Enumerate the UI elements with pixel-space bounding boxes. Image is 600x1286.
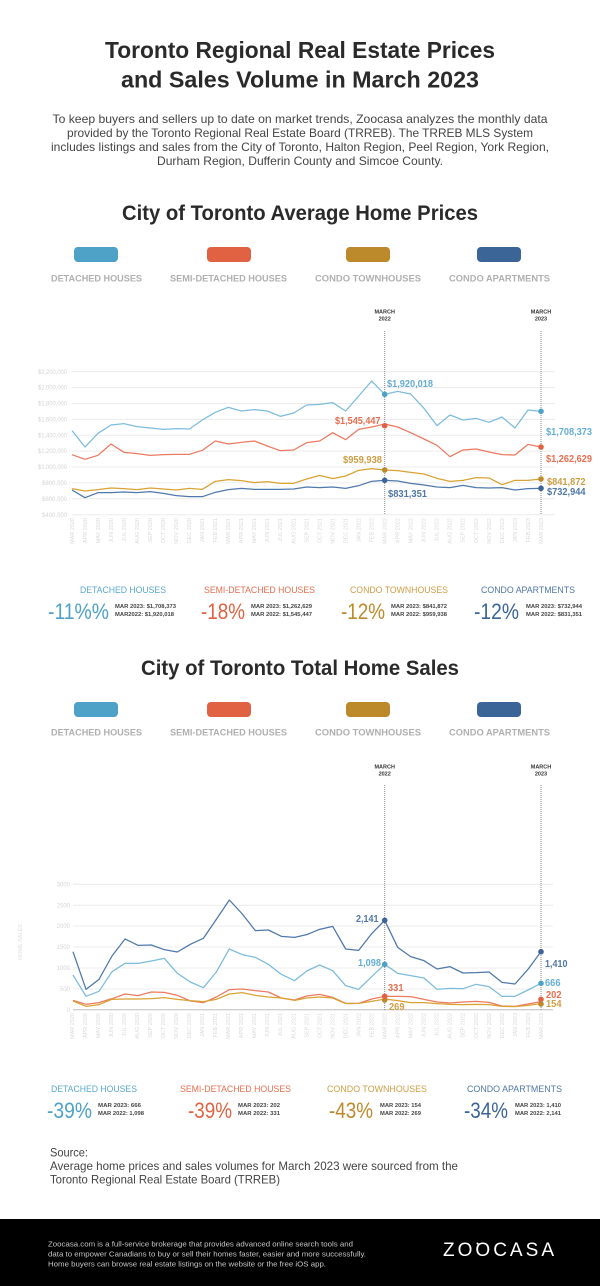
x axis month labels: JAN 2022 <box>356 518 362 542</box>
x axis month labels: SEP 2022 <box>461 1013 467 1038</box>
x axis month labels: JUL 2020 <box>122 518 128 541</box>
data points and value labels: $1,920,018 <box>387 378 433 390</box>
x axis month labels: MAY 2022 <box>409 518 415 543</box>
x axis month labels <box>70 1013 545 1039</box>
march markers: 2022 <box>379 772 391 778</box>
march markers: MARCH <box>531 310 551 316</box>
data points and value labels: $841,872 <box>547 476 586 488</box>
data points and value labels: $1,708,373 <box>546 426 592 438</box>
stats row: prices <box>48 585 583 624</box>
intro text block: To keep buyers and sellers up to date on market trends, Zoocasa analyzes the monthly data <box>52 112 548 126</box>
y axis grid and labels: $1,600,000 <box>38 418 68 424</box>
x axis month labels: AUG 2021 <box>292 1013 298 1039</box>
y axis grid and labels: $1,400,000 <box>38 433 68 439</box>
y axis grid and labels: $1,200,000 <box>38 449 68 455</box>
heading: total home sales: City of Toronto Total Home Sales <box>141 657 459 680</box>
source text block: Source: <box>50 1146 88 1160</box>
x axis month labels: APR 2021 <box>239 1013 245 1038</box>
data points and value labels: $831,351 <box>388 488 427 500</box>
stat: detached <box>47 1084 144 1123</box>
y axis grid and labels: 3000 <box>57 882 71 888</box>
line chart: average home prices <box>38 310 592 544</box>
stat: townhouses: MAR 2022: 269 <box>380 1111 421 1117</box>
footer text: Home buyers can browse real estate listings on the website or the free iOS app. <box>48 1260 326 1268</box>
stat: apartments: -34% <box>464 1098 508 1123</box>
stat: detached: MAR 2023: $1,708,373 <box>115 604 176 610</box>
x axis month labels: NOV 2021 <box>330 1013 336 1039</box>
march markers: 2023 <box>535 316 547 322</box>
title <box>105 37 495 92</box>
intro text block: Durham Region, Dufferin County and Simcoe County. <box>157 154 443 168</box>
footer text <box>48 1240 366 1268</box>
x axis month labels: APR 2021 <box>239 518 245 543</box>
x axis month labels: MAR 2023 <box>539 1013 545 1039</box>
x axis month labels: NOV 2022 <box>487 518 493 544</box>
source text block: Toronto Regional Real Estate Board (TRREB) <box>50 1173 280 1187</box>
x axis month labels: MAY 2021 <box>252 518 258 543</box>
stat: apartments: CONDO APARTMENTS <box>467 1084 562 1094</box>
y axis grid and labels <box>38 370 555 519</box>
footer <box>0 1219 600 1286</box>
stat: semi-detached: -39% <box>188 1098 232 1123</box>
x axis month labels: FEB 2023 <box>526 518 532 542</box>
x axis month labels: APR 2020 <box>83 1013 89 1038</box>
x axis month labels: AUG 2022 <box>448 1013 454 1039</box>
x axis month labels: JAN 2022 <box>356 1013 362 1037</box>
stat: townhouses: MAR 2022: $959,938 <box>391 612 447 618</box>
y axis grid and labels: $800,000 <box>42 481 68 487</box>
x axis month labels: OCT 2022 <box>474 1013 480 1038</box>
y axis grid and labels: $400,000 <box>42 513 68 519</box>
x axis month labels: DEC 2021 <box>344 1013 350 1038</box>
y axis grid and labels <box>57 882 553 1014</box>
stat: semi-detached: MAR 2023: $1,262,629 <box>251 604 312 610</box>
data points and value labels: 1,410 <box>545 958 568 970</box>
line chart: total home sales <box>18 764 568 1039</box>
x axis month labels: JUN 2021 <box>265 518 271 542</box>
x axis month labels: SEP 2021 <box>304 1013 310 1038</box>
march markers <box>374 764 551 1010</box>
stat: townhouses <box>327 1084 427 1123</box>
march markers: MARCH <box>374 764 395 770</box>
x axis month labels: FEB 2021 <box>213 1013 219 1037</box>
source text block <box>50 1146 458 1187</box>
x axis month labels: MAR 2021 <box>226 518 232 544</box>
x axis month labels: MAY 2020 <box>96 518 102 543</box>
y axis grid and labels: $1,000,000 <box>38 465 68 471</box>
x axis month labels: JUL 2022 <box>435 1013 441 1036</box>
x axis month labels: JAN 2023 <box>513 1013 519 1037</box>
stat: townhouses: MAR 2023: $841,872 <box>391 604 447 610</box>
stat: apartments <box>464 1084 562 1123</box>
x axis month labels: FEB 2022 <box>370 518 376 542</box>
legend: sales: CONDO TOWNHOUSES <box>315 728 421 738</box>
x axis month labels: MAR 2022 <box>383 518 389 544</box>
legend: sales: DETACHED HOUSES <box>51 728 142 738</box>
axis title: HOME SALES <box>18 924 24 960</box>
stat: detached: DETACHED HOUSES <box>80 585 166 595</box>
legend: prices: SEMI-DETACHED HOUSES <box>170 274 287 284</box>
y axis grid and labels: 0 <box>67 1008 71 1014</box>
x axis month labels: DEC 2021 <box>344 518 350 543</box>
x axis month labels: DEC 2020 <box>187 1013 193 1038</box>
march markers: 2022 <box>379 316 391 322</box>
x axis month labels: DEC 2022 <box>500 1013 506 1038</box>
march markers: MARCH <box>531 764 551 770</box>
x axis month labels: OCT 2021 <box>318 518 324 543</box>
y axis grid and labels: $2,000,000 <box>38 386 68 392</box>
stat: detached: MAR2022: $1,920,018 <box>115 612 174 618</box>
x axis month labels: DEC 2022 <box>500 518 506 543</box>
logo: Zoocasa: ZOOCASA <box>443 1240 554 1261</box>
stat: detached: MAR 2023: 666 <box>98 1103 141 1109</box>
data points and value labels: 154 <box>546 998 562 1010</box>
stat: apartments: MAR 2022: 2,141 <box>515 1111 561 1117</box>
legend: prices: DETACHED HOUSES <box>51 274 142 284</box>
y axis grid and labels: $1,800,000 <box>38 402 68 408</box>
x axis month labels: JUN 2020 <box>109 1013 115 1037</box>
x axis month labels <box>70 518 545 544</box>
stats row: sales <box>47 1084 562 1123</box>
data points and value labels: $1,545,447 <box>335 415 381 427</box>
legend: sales: CONDO APARTMENTS <box>449 728 550 738</box>
title: Toronto Regional Real Estate Prices <box>105 37 495 63</box>
x axis month labels: AUG 2022 <box>448 518 454 544</box>
y axis grid and labels: 2000 <box>57 924 71 930</box>
stat: semi-detached: MAR 2022: 331 <box>238 1111 280 1117</box>
x axis month labels: MAR 2020 <box>70 518 76 544</box>
x axis month labels: OCT 2021 <box>318 1013 324 1038</box>
march markers: 2023 <box>535 772 547 778</box>
x axis month labels: JUL 2021 <box>278 518 284 541</box>
x axis month labels: JUL 2020 <box>122 1013 128 1036</box>
intro text block: provided by the Toronto Regional Real Estate Board (TRREB). The TRREB MLS System <box>67 126 533 140</box>
x axis month labels: MAR 2022 <box>383 1013 389 1039</box>
data points and value labels: 331 <box>388 982 404 994</box>
data points and value labels: $1,262,629 <box>546 453 592 465</box>
stat: semi-detached: SEMI-DETACHED HOUSES <box>180 1084 291 1094</box>
data lines <box>72 381 541 498</box>
stat: detached: -39% <box>47 1098 92 1123</box>
x axis month labels: FEB 2022 <box>370 1013 376 1037</box>
x axis month labels: SEP 2022 <box>461 518 467 543</box>
x axis month labels: MAY 2020 <box>96 1013 102 1038</box>
x axis month labels: SEP 2020 <box>148 518 154 543</box>
x axis month labels: MAY 2021 <box>252 1013 258 1038</box>
x axis month labels: JAN 2021 <box>200 518 206 542</box>
x axis month labels: APR 2020 <box>83 518 89 543</box>
stat: detached: MAR 2022: 1,098 <box>98 1111 144 1117</box>
x axis month labels: AUG 2020 <box>135 518 141 544</box>
y axis grid and labels: 2500 <box>57 903 71 909</box>
stat: apartments: MAR 2023: $732,944 <box>526 604 583 610</box>
x axis month labels: NOV 2022 <box>487 1013 493 1039</box>
x axis month labels: OCT 2020 <box>161 518 167 543</box>
source text block: Average home prices and sales volumes for March 2023 were sourced from the <box>50 1159 458 1173</box>
x axis month labels: JUN 2020 <box>109 518 115 542</box>
x axis month labels: NOV 2020 <box>174 518 180 544</box>
x axis month labels: AUG 2020 <box>135 1013 141 1039</box>
stat: apartments <box>474 585 583 624</box>
data points and value labels: $732,944 <box>547 486 586 498</box>
x axis month labels: SEP 2021 <box>304 518 310 543</box>
stat: apartments: -12% <box>474 599 519 624</box>
stat: semi-detached <box>180 1084 291 1123</box>
x axis month labels: MAR 2021 <box>226 1013 232 1039</box>
legend: prices: CONDO APARTMENTS <box>449 274 550 284</box>
x axis month labels: NOV 2020 <box>174 1013 180 1039</box>
legend: sales: SEMI-DETACHED HOUSES <box>170 728 287 738</box>
y axis grid and labels: 1000 <box>57 966 71 972</box>
data points and value labels: 666 <box>545 977 561 989</box>
x axis month labels: AUG 2021 <box>292 518 298 544</box>
x axis month labels: JUL 2021 <box>278 1013 284 1036</box>
x axis month labels: JAN 2023 <box>513 518 519 542</box>
stat: semi-detached <box>201 585 315 624</box>
stat: townhouses: MAR 2023: 154 <box>380 1103 422 1109</box>
y axis grid and labels: 500 <box>60 987 71 993</box>
data points and value labels <box>335 378 592 500</box>
x axis month labels: JUN 2021 <box>265 1013 271 1037</box>
x axis month labels: MAR 2023 <box>539 518 545 544</box>
x axis month labels: JUL 2022 <box>435 518 441 541</box>
stat: apartments: MAR 2022: $831,351 <box>526 612 582 618</box>
stat: townhouses: -12% <box>341 599 385 624</box>
stat: semi-detached: MAR 2023: 202 <box>238 1103 280 1109</box>
march markers: MARCH <box>374 310 395 316</box>
x axis month labels: FEB 2021 <box>213 518 219 542</box>
legend: sales <box>51 702 550 738</box>
stat: apartments: MAR 2023: 1,410 <box>515 1103 561 1109</box>
y axis grid and labels: $600,000 <box>42 497 68 503</box>
x axis month labels: FEB 2023 <box>526 1013 532 1037</box>
x axis month labels: APR 2022 <box>396 1013 402 1038</box>
title: and Sales Volume in March 2023 <box>121 66 479 92</box>
x axis month labels: JAN 2021 <box>200 1013 206 1037</box>
y axis grid and labels: $2,200,000 <box>38 370 68 376</box>
intro text block <box>51 112 549 168</box>
intro text block: includes listings and sales from the City of Toronto, Halton Region, Peel Region, York Region, <box>51 140 549 154</box>
y axis grid and labels: 1500 <box>57 945 71 951</box>
data lines <box>73 900 541 1007</box>
x axis month labels: APR 2022 <box>396 518 402 543</box>
stat: detached: -11%% <box>48 599 109 624</box>
stat: semi-detached: MAR 2022: $1,545,447 <box>251 612 312 618</box>
data points and value labels <box>356 913 568 1013</box>
stat: detached <box>48 585 176 624</box>
data points and value labels: 269 <box>389 1001 405 1013</box>
x axis month labels: OCT 2022 <box>474 518 480 543</box>
legend: prices <box>51 247 550 284</box>
legend: prices: CONDO TOWNHOUSES <box>315 274 421 284</box>
x axis month labels: JUN 2022 <box>422 518 428 542</box>
footer text: data to empower Canadians to buy or sell their homes faster, easier and more successfully. <box>48 1250 366 1258</box>
stat: townhouses: -43% <box>329 1098 373 1123</box>
x axis month labels: SEP 2020 <box>148 1013 154 1038</box>
stat: detached: DETACHED HOUSES <box>51 1084 137 1094</box>
x axis month labels: NOV 2021 <box>330 518 336 544</box>
stat: townhouses: CONDO TOWNHOUSES <box>350 585 448 595</box>
march markers <box>374 310 551 514</box>
stat: semi-detached: -18% <box>201 599 245 624</box>
data points and value labels: 1,098 <box>358 957 381 969</box>
stat: semi-detached: SEMI-DETACHED HOUSES <box>204 585 315 595</box>
data points and value labels: $959,938 <box>343 454 382 466</box>
x axis month labels: MAY 2022 <box>409 1013 415 1038</box>
x axis month labels: JUN 2022 <box>422 1013 428 1037</box>
x axis month labels: MAR 2020 <box>70 1013 76 1039</box>
heading: average home prices: City of Toronto Average Home Prices <box>122 202 478 225</box>
footer text: Zoocasa.com is a full-service brokerage that provides advanced online search tools and <box>48 1240 353 1248</box>
data points and value labels: 202 <box>546 989 562 1001</box>
data points and value labels: 2,141 <box>356 913 379 925</box>
stat: townhouses: CONDO TOWNHOUSES <box>327 1084 427 1094</box>
stat: apartments: CONDO APARTMENTS <box>481 585 575 595</box>
x axis month labels: DEC 2020 <box>187 518 193 543</box>
x axis month labels: OCT 2020 <box>161 1013 167 1038</box>
stat: townhouses <box>341 585 448 624</box>
